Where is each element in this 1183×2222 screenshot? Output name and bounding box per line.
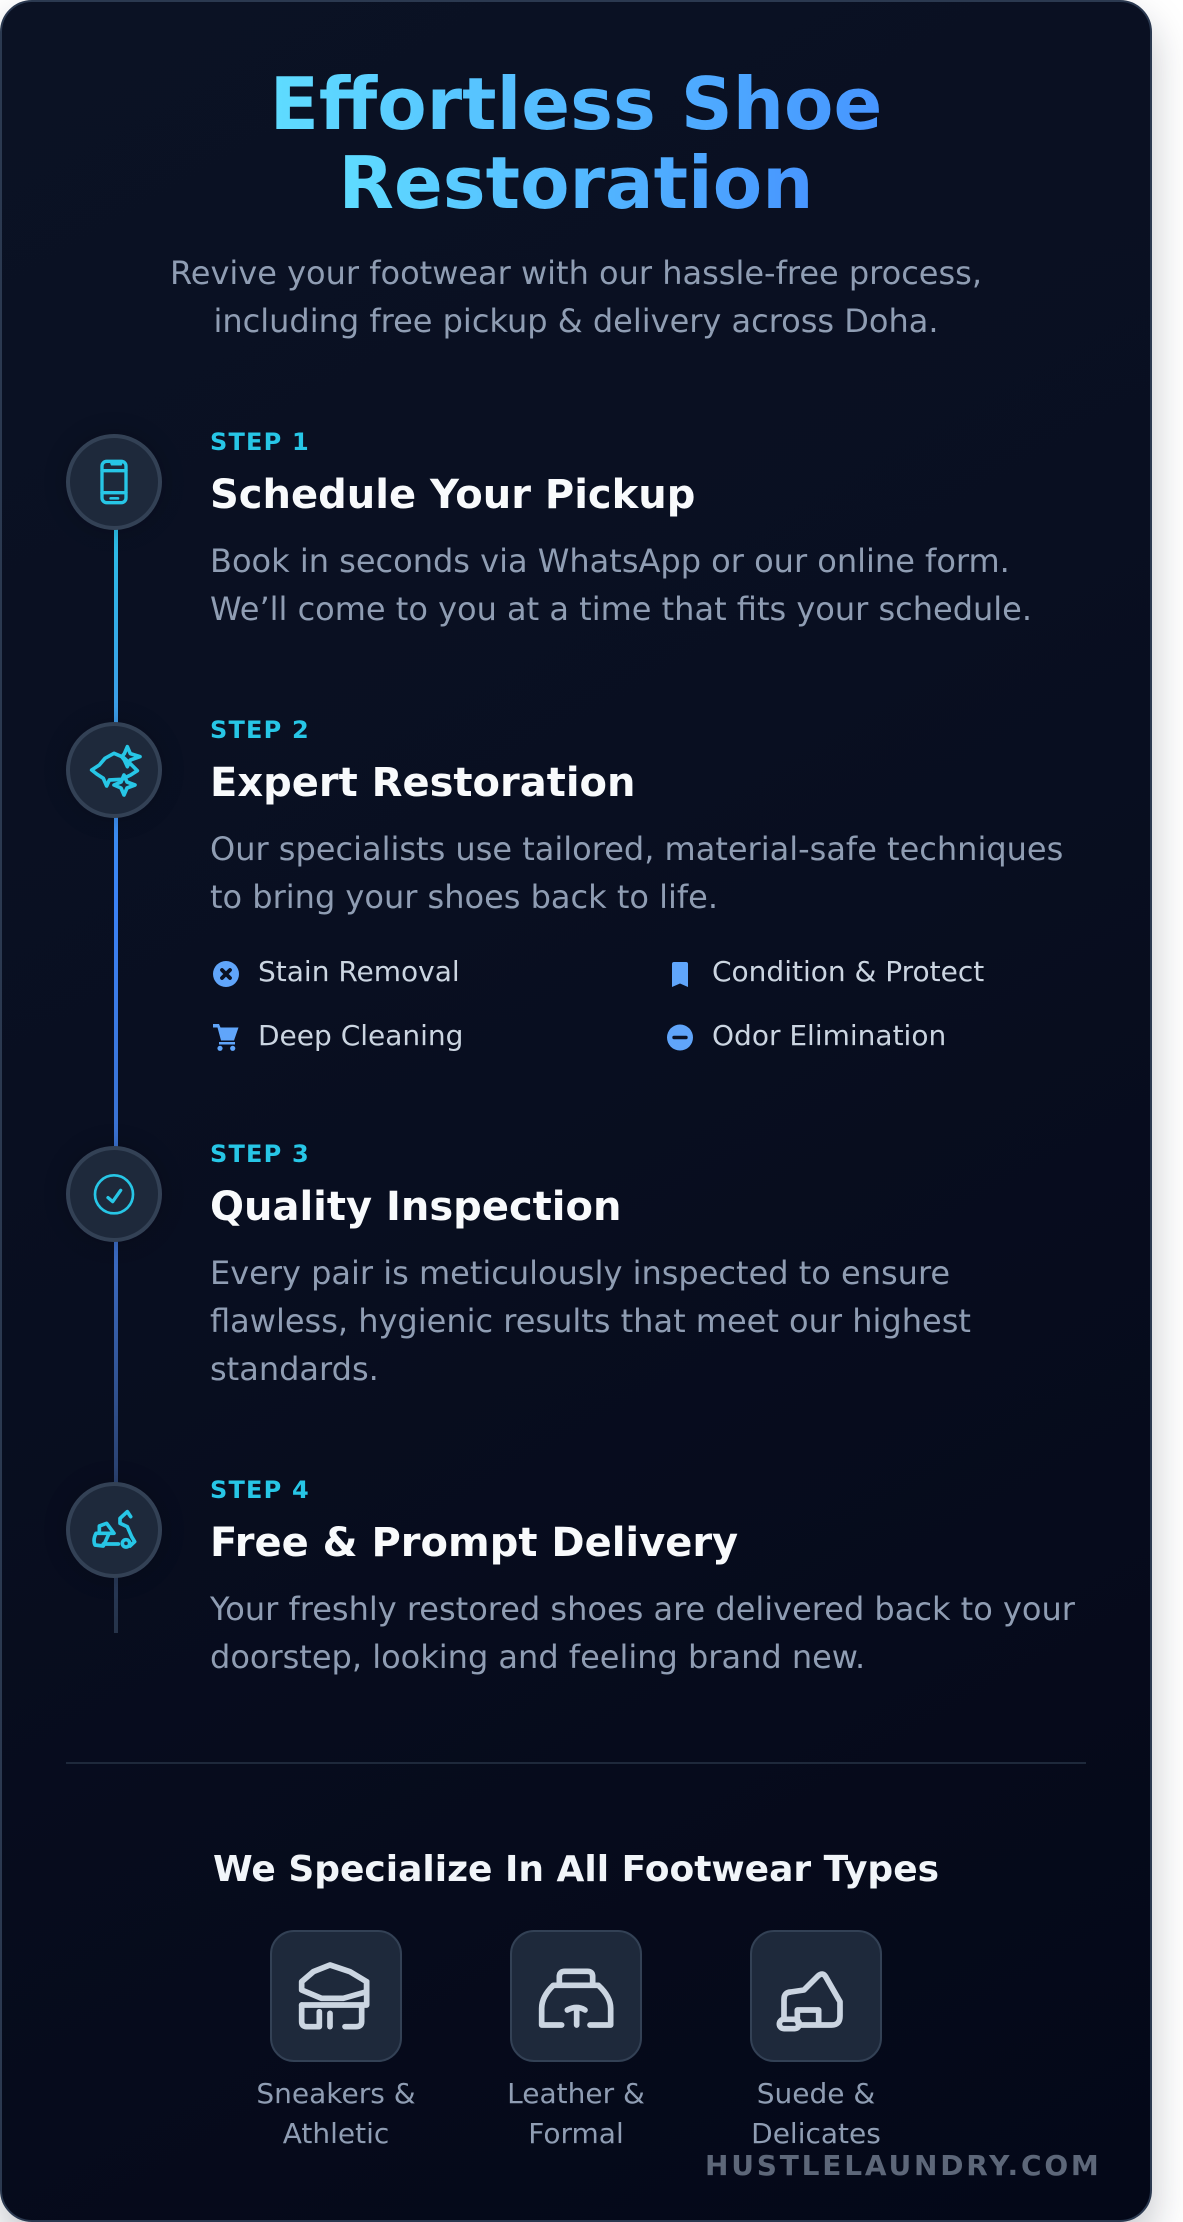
label: Leather & xyxy=(507,2077,645,2110)
icon: sparkling shoe xyxy=(66,722,162,818)
label: Formal xyxy=(528,2117,624,2150)
icon: suede boot xyxy=(750,1930,882,2062)
service list xyxy=(213,955,984,1052)
label: Delicates xyxy=(751,2117,881,2150)
step label: STEP 3 xyxy=(210,1140,310,1168)
step 4 xyxy=(66,1476,1075,1676)
subtitle xyxy=(170,254,982,340)
service: stain removal: Stain Removal xyxy=(258,955,460,988)
step heading: Schedule Your Pickup xyxy=(210,472,695,518)
step description xyxy=(210,542,1032,628)
step 2 xyxy=(66,712,1063,1052)
step description: to bring your shoes back to life. xyxy=(210,878,718,916)
tile: sneakers xyxy=(256,1930,416,2150)
title: Effortless Shoe xyxy=(270,62,882,146)
step description: Your freshly restored shoes are delivered back to your xyxy=(210,1590,1075,1628)
icon: sneaker xyxy=(270,1930,402,2062)
step label: STEP 2 xyxy=(210,716,310,744)
step heading: Expert Restoration xyxy=(210,760,636,806)
service: deep cleaning: Deep Cleaning xyxy=(258,1019,463,1052)
subtitle: Revive your footwear with our hassle-free process, xyxy=(170,254,982,292)
step description: We’ll come to you at a time that fits your schedule. xyxy=(210,590,1032,628)
step heading: Quality Inspection xyxy=(210,1184,621,1230)
step description: Book in seconds via WhatsApp or our online form. xyxy=(210,542,1010,580)
label: Suede & xyxy=(757,2077,875,2110)
step description: Our specialists use tailored, material-safe techniques xyxy=(210,830,1063,868)
watermark: HUSTLELAUNDRY.COM xyxy=(705,2149,1102,2182)
tile: leather xyxy=(507,1930,645,2150)
label: Sneakers & xyxy=(256,2077,416,2110)
step 1 xyxy=(66,428,1032,628)
step heading: Free & Prompt Delivery xyxy=(210,1520,738,1566)
icon: delivery scooter xyxy=(66,1482,162,1578)
label xyxy=(256,2077,416,2150)
step description xyxy=(210,1254,971,1388)
subtitle: including free pickup & delivery across Doha. xyxy=(213,302,939,340)
step description xyxy=(210,830,1063,916)
icon: leather shoe xyxy=(510,1930,642,2062)
label xyxy=(507,2077,645,2150)
icon: check circle xyxy=(66,1146,162,1242)
service: condition and protect: Condition & Protect xyxy=(712,955,984,988)
step label: STEP 1 xyxy=(210,428,310,456)
title xyxy=(270,62,882,225)
label: Athletic xyxy=(283,2117,389,2150)
tile: suede xyxy=(750,1930,882,2150)
label xyxy=(751,2077,881,2150)
step description: Every pair is meticulously inspected to ensure xyxy=(210,1254,950,1292)
step description: flawless, hygienic results that meet our highest xyxy=(210,1302,971,1340)
footwear section heading: We Specialize In All Footwear Types xyxy=(213,1849,939,1890)
step 3 xyxy=(66,1137,971,1388)
service: odor elimination: Odor Elimination xyxy=(712,1019,946,1052)
title: Restoration xyxy=(339,141,813,225)
step description xyxy=(210,1590,1075,1676)
timeline line xyxy=(114,482,118,1633)
step description: standards. xyxy=(210,1350,379,1388)
step label: STEP 4 xyxy=(210,1476,310,1504)
icon: phone xyxy=(66,434,162,530)
step description: doorstep, looking and feeling brand new. xyxy=(210,1638,865,1676)
